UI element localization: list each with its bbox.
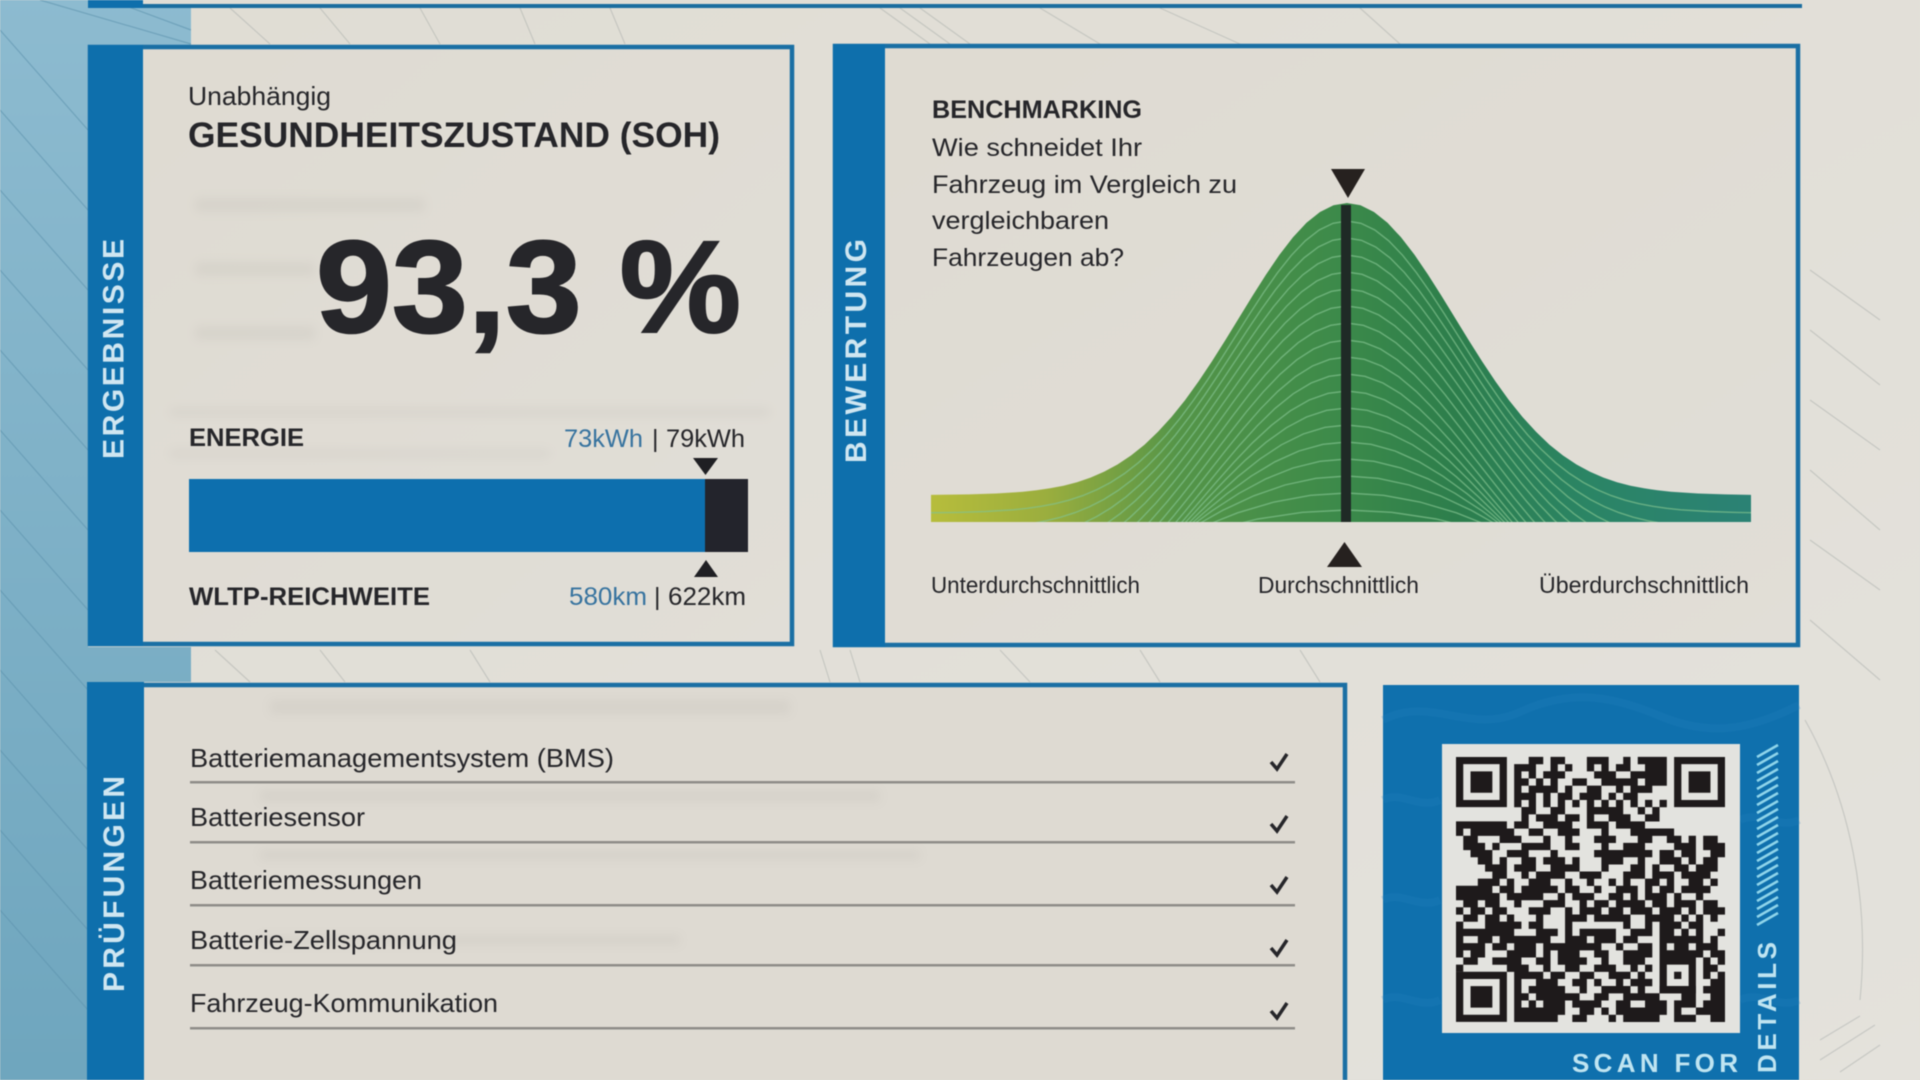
wave texture	[1383, 697, 1799, 1003]
stripes	[1757, 745, 1778, 925]
check row: Fahrzeug-Kommunikation: Fahrzeug-Kommunikation	[190, 988, 498, 1018]
heading: Gesundheitszustand: GESUNDHEITSZUSTAND (SOH)	[188, 116, 720, 155]
text: benchmarking question: Fahrzeug im Vergleich zu	[932, 171, 1237, 199]
text: benchmarking question	[932, 134, 1237, 272]
axis labels: Überdurchschnittlich	[1539, 572, 1749, 598]
blue background	[1383, 685, 1799, 1080]
panel: Bewertung	[832, 42, 1802, 648]
energy values: 73kWh	[564, 425, 643, 453]
check row: Batteriemessungen	[190, 865, 1295, 906]
check row: Batteriemessungen: Batteriemessungen	[190, 865, 422, 895]
panel: Prüfungen	[87, 682, 1345, 1080]
heading: Benchmarking: BENCHMARKING	[932, 96, 1142, 124]
sidebar: PRÜFUNGEN: PRÜFUNGEN	[98, 776, 131, 992]
label: Energie: ENERGIE	[189, 424, 304, 452]
axis labels	[931, 572, 1749, 598]
faint show-through text	[170, 198, 770, 457]
check row: Fahrzeug-Kommunikation	[190, 988, 1295, 1030]
sidebar: PRÜFUNGEN	[87, 682, 144, 1080]
panel frame	[90, 47, 792, 644]
range values: 622km	[668, 583, 746, 611]
chart: bell curve	[930, 202, 1752, 523]
axis labels: Unterdurchschnittlich	[931, 572, 1140, 598]
energy values: 79kWh	[666, 425, 745, 453]
check row: Batterie-Zellspannung	[190, 925, 1295, 966]
icon: triangle down	[693, 458, 718, 475]
check row: Batteriesensor	[190, 802, 1295, 844]
icon: triangle up	[1327, 542, 1362, 567]
check row: Batteriesensor: Batteriesensor	[190, 802, 365, 832]
text: SCAN FOR: SCAN FOR	[1572, 1048, 1738, 1078]
axis labels: Durchschnittlich	[1258, 572, 1419, 598]
light blue left band	[0, 0, 191, 1080]
range values: |	[654, 583, 660, 611]
panel: Ergebnisse	[88, 45, 792, 646]
sidebar: BEWERTUNG	[833, 44, 885, 647]
text: benchmarking question: vergleichbaren	[932, 207, 1109, 235]
panel: top section edge	[88, 0, 1802, 8]
check row: BMS	[190, 743, 1295, 784]
label: Unabhängig: Unabhängig	[188, 81, 331, 111]
sidebar: BEWERTUNG: BEWERTUNG	[840, 239, 873, 463]
big value: 93,3 %: 93,3 %	[316, 213, 741, 360]
check row: BMS: Batteriemanagementsystem (BMS)	[190, 743, 614, 773]
panel frame	[835, 46, 1798, 645]
energy values: |	[652, 425, 658, 453]
range values	[569, 583, 746, 611]
faint show-through text	[260, 700, 920, 945]
panel: QR code	[1383, 685, 1799, 1080]
label: WLTP-Reichweite: WLTP-REICHWEITE	[189, 583, 430, 611]
icon: triangle up	[694, 560, 718, 577]
energy values	[564, 425, 745, 453]
range values: 580km	[569, 583, 647, 611]
bar: energy and range	[189, 479, 748, 552]
sidebar: ERGEBNISSE: ERGEBNISSE	[98, 239, 130, 459]
check row: Batterie-Zellspannung: Batterie-Zellspannung	[190, 925, 457, 955]
QR code	[1442, 744, 1740, 1033]
text: DETAILS: DETAILS	[1752, 942, 1782, 1073]
sidebar: ERGEBNISSE	[88, 45, 143, 646]
text: benchmarking question: Fahrzeugen ab?	[932, 244, 1124, 272]
text: benchmarking question: Wie schneidet Ihr	[932, 134, 1142, 162]
panel frame	[90, 685, 1345, 1080]
icon: triangle down	[1331, 169, 1365, 198]
